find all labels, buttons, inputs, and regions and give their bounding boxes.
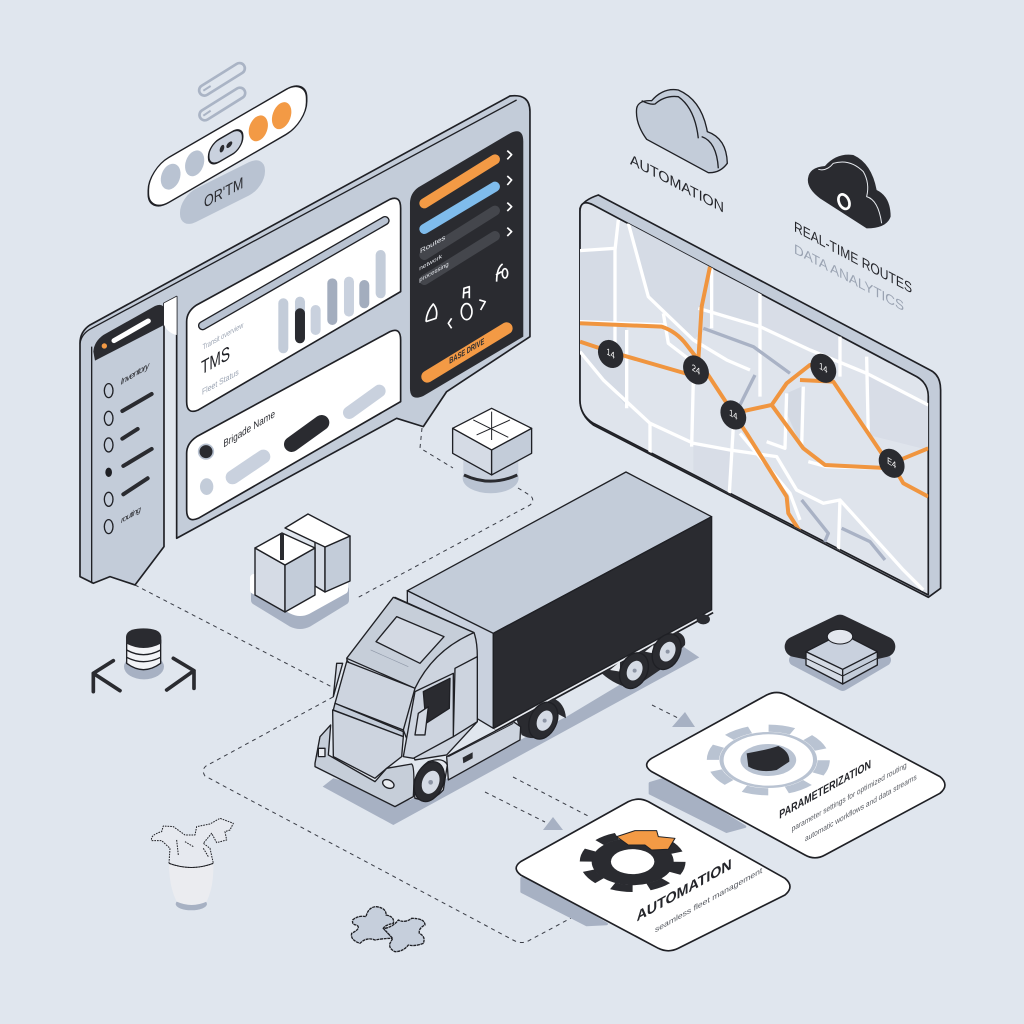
truck (315, 472, 713, 825)
panel: toggle pill with CRM label (148, 78, 307, 230)
label: DATA ANALYTICS: DATA ANALYTICS (794, 242, 904, 315)
arrow: to parameter card (672, 712, 695, 727)
icon: database with brackets (93, 628, 194, 692)
map markers: 24 (692, 362, 700, 377)
label: REAL-TIME ROUTES: REAL-TIME ROUTES (794, 219, 912, 297)
icon: stacked boxes on platform (254, 514, 350, 624)
icon: dark cloud (808, 155, 891, 228)
sidebar menu: Inventory (121, 359, 151, 387)
trailer (407, 472, 713, 730)
icon: light cloud (636, 90, 727, 173)
card: shipment actions (187, 330, 401, 520)
icon: stacked device on dark base (795, 625, 885, 685)
card: parameterization: automatic workflows and data streams (805, 772, 917, 844)
front wheel (409, 757, 450, 806)
panel: TMS dashboard (80, 96, 530, 585)
map blocks (580, 220, 928, 590)
card shadow (522, 878, 607, 925)
map markers: 14 (819, 360, 827, 376)
sidebar outer shell (80, 96, 530, 585)
icon: paperclips (197, 61, 247, 122)
map orange routes (580, 267, 928, 537)
card shadow (650, 778, 745, 832)
card body (516, 799, 790, 951)
bar chart (283, 255, 381, 348)
card: shipment actions: Brigade Name (223, 408, 275, 450)
icon: potted plant (151, 818, 233, 910)
map markers: E4 (887, 455, 896, 471)
label: ORTM tag (180, 154, 265, 230)
card: automation: seamless fleet management (655, 865, 763, 934)
map markers: 14 (607, 346, 615, 361)
toggle pill body (148, 78, 307, 214)
card: parameterization: parameter settings for optimized routing (792, 760, 907, 834)
icon: puzzle pieces (351, 907, 425, 952)
card: automation: AUTOMATION (637, 856, 732, 925)
middle wheel (517, 697, 566, 744)
map markers (593, 335, 910, 483)
map markers: 14 (729, 407, 737, 422)
icon: cube on base (453, 408, 532, 493)
icon: dark gear (567, 824, 699, 900)
map grey roads (703, 328, 885, 560)
card body (647, 692, 945, 858)
panel: dark route menu: BASE DRIVE (449, 336, 484, 366)
panel: dark route menu: network (419, 253, 443, 273)
sidebar header (93, 305, 164, 361)
dashed connector lines (135, 428, 678, 942)
card: automation (516, 799, 790, 951)
panel: route map (580, 195, 941, 597)
label: AUTOMATION: AUTOMATION (630, 152, 724, 217)
arrow: to automation card (543, 817, 563, 830)
card: TMS overview with bars: Transit overview (203, 319, 244, 352)
label: ORTM tag: OR'TM (204, 173, 243, 212)
panel: dark route menu: Routes (420, 233, 446, 255)
rear wheels (602, 629, 687, 693)
card: parameterization: PARAMETERIZATION (779, 756, 871, 822)
card: TMS overview with bars: TMS (201, 342, 230, 380)
card: TMS overview with bars (187, 198, 401, 411)
truck cab (315, 597, 521, 807)
sidebar menu (104, 359, 152, 534)
card: parameterization (647, 692, 945, 858)
panel: dark route menu (410, 131, 523, 398)
sidebar menu: routing (121, 504, 141, 525)
card: TMS overview with bars: Fleet Status (202, 367, 239, 397)
icon: light gear (690, 715, 847, 805)
panel: dark route menu: processing (419, 261, 449, 284)
map streets (580, 220, 928, 590)
truck ground shadow (323, 647, 699, 825)
